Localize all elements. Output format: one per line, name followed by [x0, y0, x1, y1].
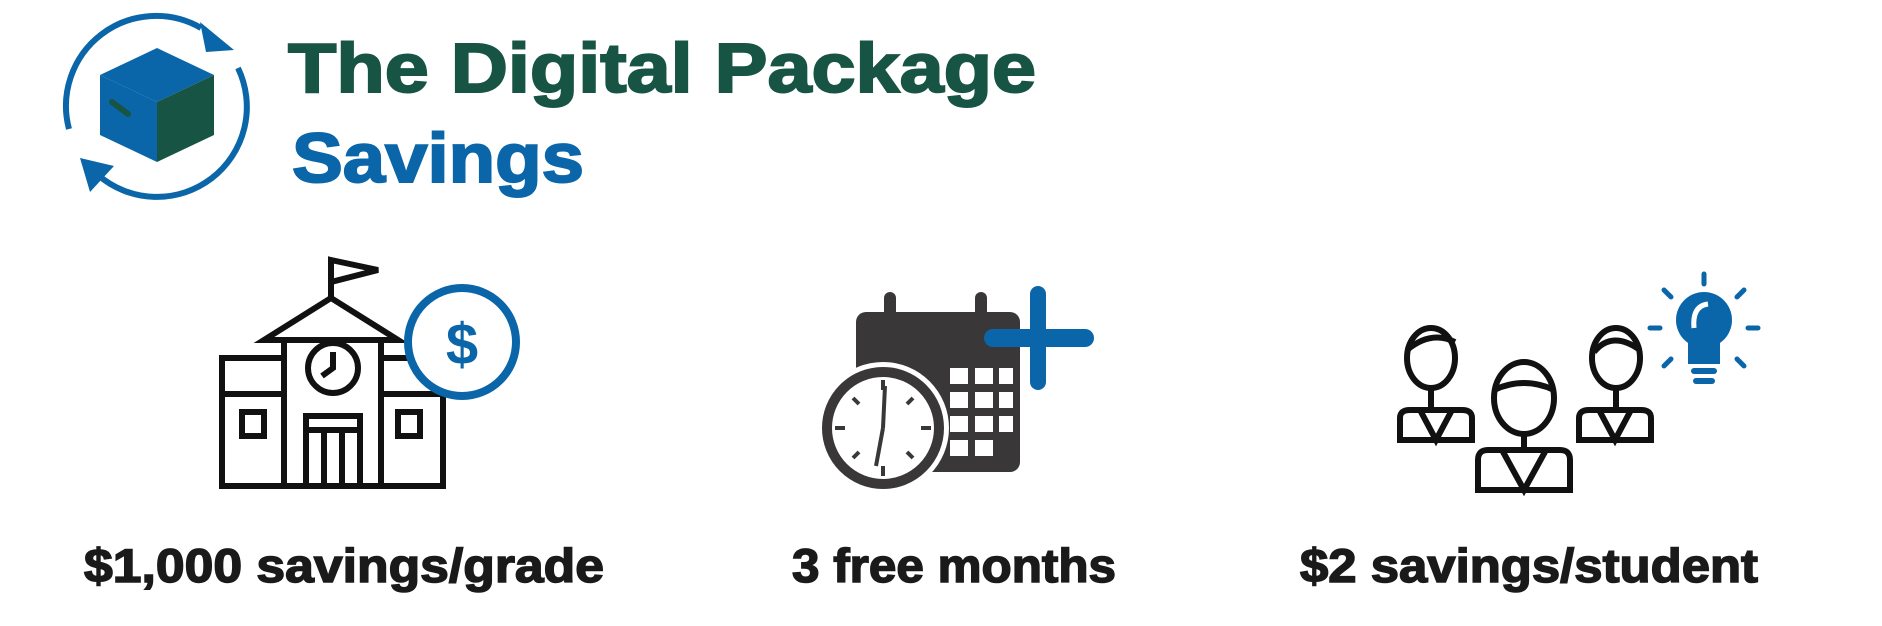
- label: savings per student: $2 savings/student: [1300, 539, 1758, 592]
- icon: people: [1400, 328, 1651, 490]
- icon: school with dollar coin: $: [446, 312, 478, 377]
- logo: box with circular arrows: [66, 16, 247, 197]
- title: The Digital Package: [288, 29, 1036, 107]
- icon: school with dollar coin: [222, 260, 516, 486]
- label: savings per grade: $1,000 savings/grade: [84, 539, 604, 592]
- label: free months: 3 free months: [792, 539, 1116, 592]
- subtitle: Savings: [292, 119, 584, 197]
- icon: lightbulb: [1650, 274, 1758, 384]
- icon: calendar with clock and plus: [817, 286, 1094, 494]
